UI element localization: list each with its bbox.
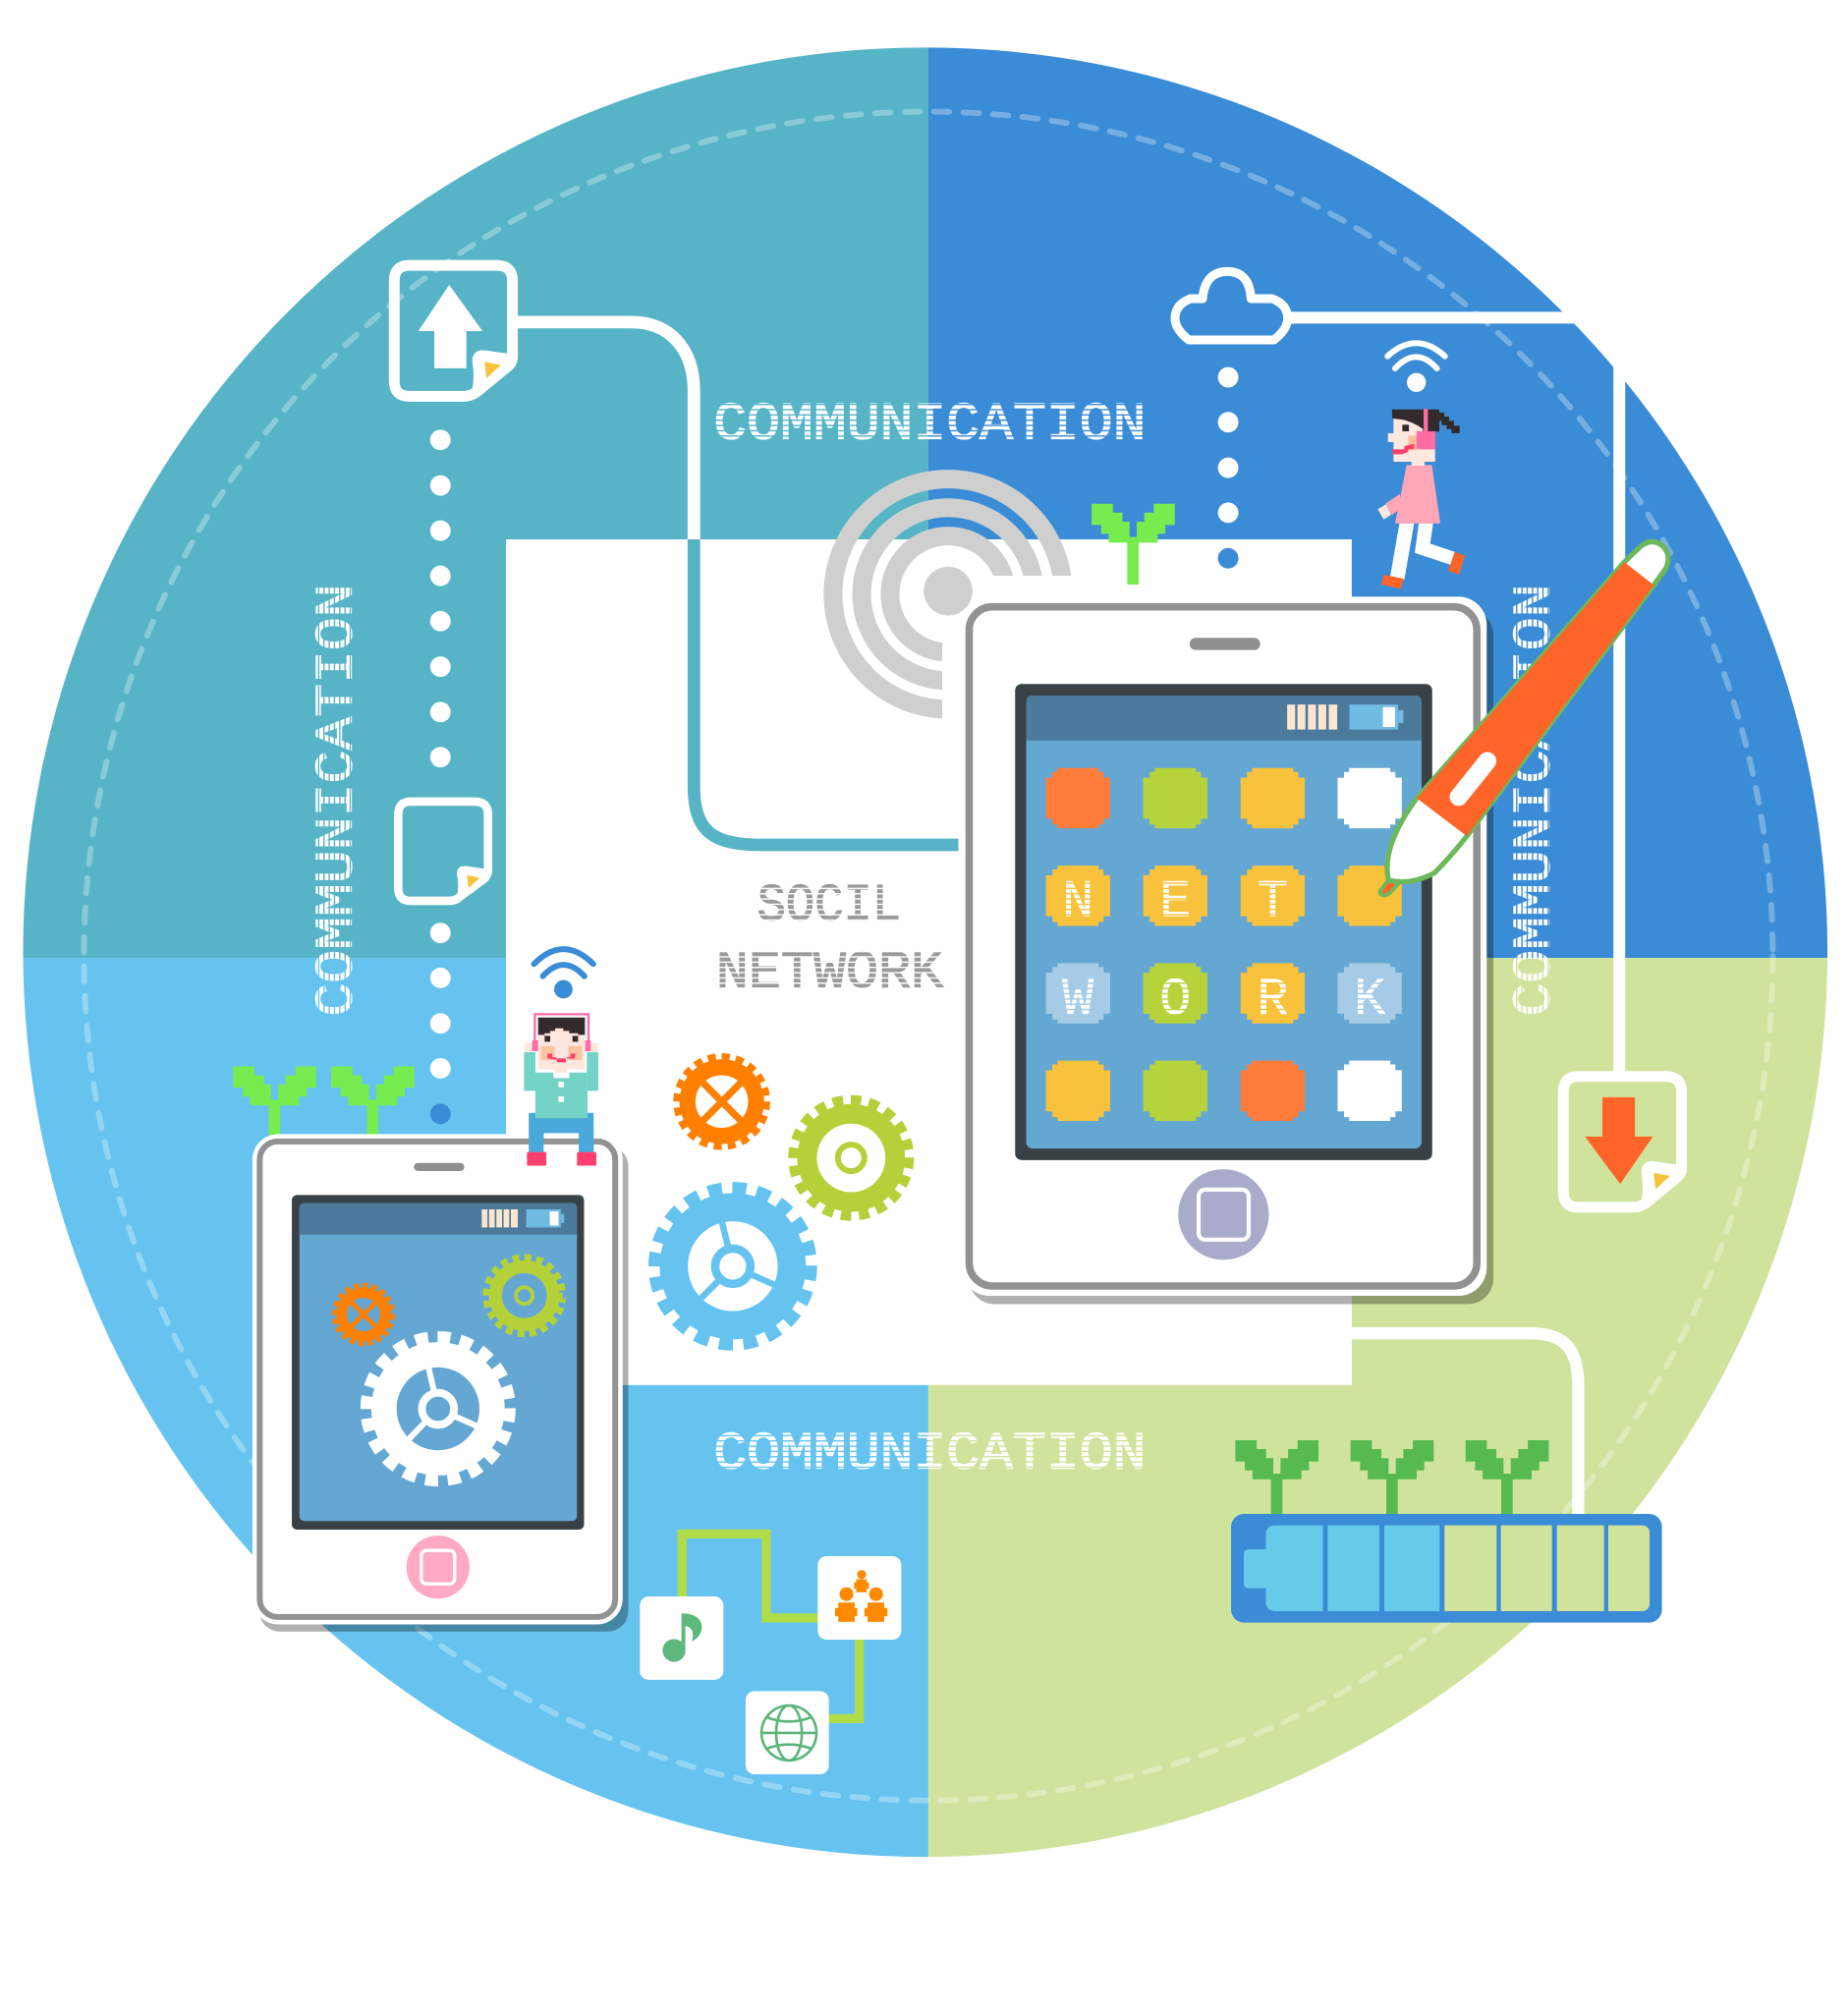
dotted path left upper bbox=[430, 429, 451, 767]
battery bbox=[1231, 1514, 1662, 1623]
app icon grid: O bbox=[1159, 971, 1191, 1031]
small phone home button bbox=[407, 1536, 470, 1598]
icon: blank document bbox=[398, 802, 488, 901]
wifi icon above boy bbox=[534, 949, 593, 998]
app icon grid: T bbox=[1257, 873, 1288, 933]
boy head and arms bbox=[524, 1014, 598, 1102]
pixel girl bbox=[1377, 409, 1465, 588]
wifi icon above girl bbox=[1387, 343, 1445, 392]
app icon grid: K bbox=[1354, 971, 1386, 1031]
gear: orange bbox=[678, 1057, 766, 1146]
app icon grid: W bbox=[1062, 971, 1094, 1031]
heading: socil network: NETWORK bbox=[716, 944, 944, 1004]
icon: upload document bbox=[394, 265, 514, 396]
dotted path left lower bbox=[430, 922, 451, 1124]
icon: globe bbox=[746, 1691, 829, 1774]
icon: cloud bbox=[1175, 271, 1288, 340]
large phone speaker bbox=[1190, 638, 1260, 650]
small phone speaker bbox=[414, 1163, 465, 1171]
heading: communication right vertical: COMMUNICATION bbox=[1506, 584, 1566, 1017]
connector line from cloud to download document bbox=[1287, 317, 1619, 1073]
dotted path from cloud bbox=[1218, 367, 1239, 569]
app icon grid: R bbox=[1257, 971, 1288, 1031]
gear: green bbox=[794, 1100, 909, 1215]
sprouts above battery bbox=[1235, 1440, 1548, 1521]
app icon grid: E bbox=[1159, 873, 1191, 933]
icon: people group bbox=[817, 1556, 901, 1640]
large phone screen bbox=[1015, 684, 1432, 1160]
heading: socil network bbox=[716, 877, 944, 1004]
small phone gear white bbox=[366, 1337, 510, 1481]
connector line from upload document bbox=[514, 322, 959, 845]
app icon grid: N bbox=[1062, 873, 1093, 933]
large phone bbox=[961, 596, 1493, 1305]
large phone home button bbox=[1178, 1169, 1268, 1259]
small phone bbox=[252, 1134, 629, 1632]
small phone gear green bbox=[486, 1258, 563, 1334]
gear: blue bbox=[654, 1188, 812, 1345]
heading: communication left vertical: COMMUNICATION bbox=[308, 584, 367, 1017]
dashed inner ring bbox=[84, 112, 1772, 1801]
sprouts above small phone bbox=[233, 1066, 415, 1147]
heading: communication bottom: COMMUNICATION bbox=[713, 1425, 1146, 1484]
concentric signal icon bbox=[833, 479, 1063, 709]
icon: music note bbox=[640, 1596, 723, 1680]
small phone screen bbox=[292, 1195, 584, 1530]
connector line from panel to battery bbox=[1351, 1333, 1578, 1516]
central white panel bbox=[506, 539, 1352, 1385]
heading: communication top: COMMUNICATION bbox=[713, 396, 1146, 456]
pixel boy bbox=[524, 1014, 598, 1165]
small phone gear orange bbox=[335, 1286, 392, 1343]
icon: download document bbox=[1563, 1077, 1682, 1207]
app connector lines bbox=[682, 1534, 860, 1718]
boy body and legs bbox=[527, 1091, 596, 1165]
stylus pen bbox=[1379, 541, 1668, 895]
heading: socil network: SOCIL bbox=[757, 877, 901, 937]
app icon grid bbox=[1046, 768, 1402, 1121]
sprout on central panel bbox=[1092, 504, 1175, 585]
